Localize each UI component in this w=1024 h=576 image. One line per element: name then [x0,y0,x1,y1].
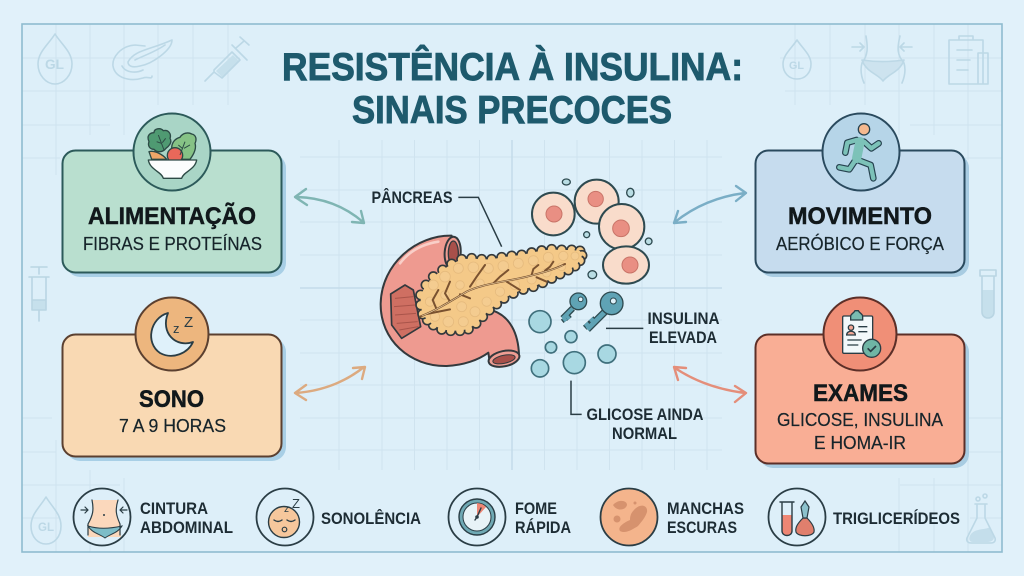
text: glicose, insulina e homa-ir: GLICOSE, INSULINA [777,410,943,430]
label: insulina elevada [648,310,720,347]
heading: movimento: MOVIMENTO [788,203,932,230]
label: insulina elevada: INSULINA [648,310,720,328]
panel: exames [756,298,969,468]
icon: glucose drop top right [783,40,811,79]
arrow: sono to centre [295,367,365,400]
text: manchas escuras: ESCURAS [667,519,737,537]
icon: moon [136,298,208,370]
label: glicose ainda normal: NORMAL [612,425,677,443]
icon: runner [822,114,900,190]
icon: faint pancreas [113,40,172,80]
sign: triglicerídeos [768,488,960,546]
text: manchas escuras: MANCHAS [667,500,744,518]
fat cells [532,179,652,284]
text: cintura abdominal: CINTURA [140,500,208,518]
icon: clock [448,488,506,546]
leader lines [458,197,643,414]
label: glicose ainda normal: GLICOSE AINDA [586,406,704,424]
text: fome rápida: RÁPIDA [515,518,571,537]
heading: alimentação: ALIMENTAÇÃO [88,202,256,230]
text: glicose, insulina e homa-ir: E HOMA-IR [814,433,906,453]
icon: faint waist [852,36,912,83]
heading: sono: SONO [139,386,204,413]
text: fome rápida [515,500,571,537]
duodenum [381,236,521,369]
icon: faint tube right [980,270,996,318]
label: pâncreas: PÂNCREAS [372,188,452,207]
arrow: movimento to centre [674,186,746,223]
icon: glucose drop top left [38,34,72,84]
text: sonolência: SONOLÊNCIA [321,509,421,528]
arrow: exames to centre [674,367,746,402]
arrow: alimentação to centre [295,189,364,223]
heading: exames: EXAMES [813,380,908,407]
panel: sono [62,298,286,461]
title: RESISTÊNCIA À INSULINA: [282,45,743,89]
bottom strip of signs [74,488,960,546]
panel: movimento [756,114,969,277]
text: 7 a 9 horas: 7 A 9 HORAS [119,416,226,436]
icon: faint syringe [205,37,249,81]
icon: clipboard [824,298,896,370]
sign: cintura abdominal [74,488,233,546]
icon: glucose drop bottom left: GL [38,520,54,534]
insulin keys [563,292,623,329]
panel: alimentação [62,114,286,277]
icon: glucose drop top right: GL [789,60,804,72]
icon: glucose drop top left: GL [45,56,64,72]
icon: moon: z [173,321,180,336]
icon: sleepy face: z [284,504,289,515]
text: cintura abdominal: ABDOMINAL [140,519,233,537]
icon: glucose drop bottom left [31,497,61,544]
text: glicose, insulina e homa-ir [777,410,943,453]
sign: sonolência [256,488,421,546]
label: insulina elevada: ELEVADA [649,329,717,347]
icon: moon: Z [184,314,193,331]
text: fibras e proteínas: FIBRAS E PROTEÍNAS [83,234,262,254]
text: cintura abdominal [140,500,233,537]
pancreas body [416,245,587,335]
label: glicose ainda normal [586,406,704,443]
text: fome rápida: FOME [515,500,557,518]
glucose bubbles [529,311,616,377]
text: manchas escuras [667,500,744,537]
sign: fome rápida [448,488,571,546]
title [282,45,743,132]
icon: test tube and flask [768,488,826,546]
title: SINAIS PRECOCES [352,89,672,132]
icon: faint syringe left [29,267,49,321]
icon: faint flask [967,494,995,543]
text: aeróbico e força: AERÓBICO E FORÇA [776,233,944,254]
icon: salad bowl [134,114,210,190]
sign: manchas escuras [600,488,744,546]
icon: waist [74,488,130,546]
text: triglicerídeos: TRIGLICERÍDEOS [833,509,960,528]
centre illustration [381,179,652,414]
icon: faint clipboard [949,36,988,84]
icon: skin patches [600,488,658,546]
icon: sleepy face: Z [292,496,300,511]
icon: sleepy face [256,488,314,546]
